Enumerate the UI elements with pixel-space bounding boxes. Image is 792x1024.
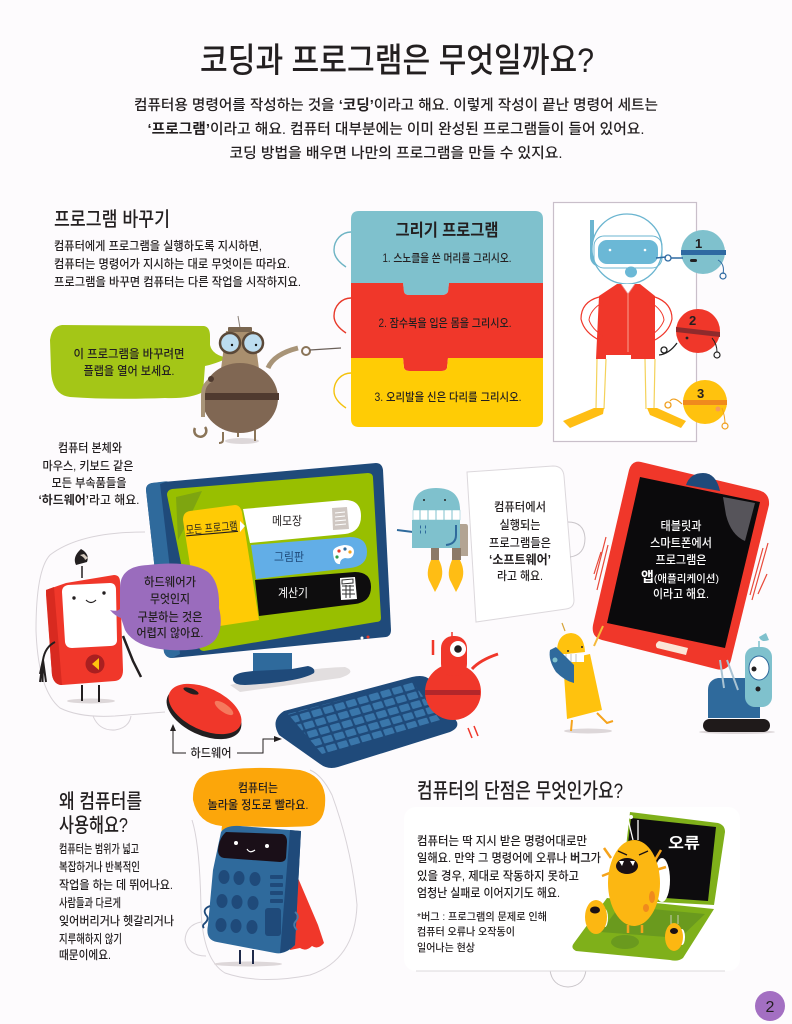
text block: why use computers: 지루해하지 않기: [59, 932, 122, 946]
speech bubble: fast: [193, 768, 325, 851]
motion lines: [594, 537, 768, 600]
big bug: [602, 815, 670, 933]
tablet body: [593, 462, 769, 670]
tablet text: 프로그램은: [656, 553, 706, 567]
speech bubble: hardware: 어렵지 않아요.: [136, 625, 204, 640]
puzzle outline around calculator: [185, 770, 357, 980]
panel: software card: 컴퓨터에서: [494, 500, 546, 514]
peeking blue figure: [686, 473, 720, 491]
puzzle tab: [550, 970, 586, 987]
text block: why use computers: 복잡하거나 반복적인: [59, 860, 140, 874]
text block: why use computers: 사람들과 다르게: [59, 896, 121, 910]
tablet buttons: [656, 641, 688, 655]
keyboard: [275, 676, 457, 768]
tablet text: 앱(애플리케이션): [641, 569, 719, 585]
icon: blue tracked robot: [699, 633, 775, 734]
card title: 그리기 프로그램: [396, 221, 498, 240]
heading: changing programs: 프로그램 바꾸기: [54, 208, 170, 231]
panel: software card: 라고 해요.: [497, 569, 543, 583]
laptop screen: [622, 818, 716, 901]
blue flap: [351, 211, 543, 295]
error label: 오류: [668, 835, 700, 852]
icon: blue ball robot 1: 1: [695, 236, 702, 251]
icon: red one-eyed robot: [425, 632, 498, 738]
calculator row: [255, 572, 371, 616]
icon: blue ball robot 1: [656, 230, 726, 279]
step 1: 1. 스노클을 쓴 머리를 그리시오.: [382, 252, 512, 265]
speech bubble: hardware: 구분하는 것은: [138, 610, 202, 624]
text block: hardware description: 모든 부속품들을: [52, 476, 126, 490]
yellow flap: [351, 358, 543, 427]
text block: changing programs: 프로그램을 바꾸면 컴퓨터는 다른 작업을 시작하지요.: [54, 275, 301, 289]
text block: hardware description: ‘하드웨어’라고 해요.: [38, 493, 140, 507]
monitor shadow: [230, 667, 350, 692]
text block: why use computers: 잊어버리거나 헷갈리거나: [59, 914, 174, 928]
icon: document: [332, 507, 349, 530]
panel: software card: 실행되는: [500, 517, 540, 532]
speech bubble: open the flap: [50, 325, 228, 399]
heading: why use computers: 사용해요?: [59, 814, 128, 837]
panel: diver picture frame: [554, 202, 696, 442]
step 3: 3. 오리발을 신은 다리를 그리시오.: [374, 391, 522, 404]
flaps behind program card: [334, 232, 351, 408]
label: hardware with arrows: [170, 724, 282, 760]
heading: why use computers: 왜 컴퓨터를: [59, 790, 142, 813]
speech bubble: fast: 컴퓨터는: [238, 781, 278, 795]
speech bubble: fast: 놀라울 정도로 빨라요.: [208, 798, 308, 812]
icon: yellow ball robot 3: [665, 380, 728, 429]
icon: calculator: [340, 577, 357, 600]
panel: software card: 프로그램들은: [489, 536, 551, 550]
text block: hardware description: 마우스, 키보드 같은: [42, 459, 134, 473]
notepad row: [243, 500, 361, 543]
speech bubble: open the flap: 플랩을 열어 보세요.: [84, 364, 174, 378]
illustration: diver: [563, 214, 686, 428]
title: 코딩과 프로그램은 무엇일까요?: [200, 42, 594, 80]
page number: [755, 991, 785, 1021]
speech bubble: hardware: 하드웨어가: [144, 575, 196, 589]
all programs panel: [183, 505, 259, 629]
text block: hardware description: [38, 441, 140, 507]
intro text: ‘프로그램’이라고 해요. 컴퓨터 대부분에는 이미 완성된 프로그램들이 들어 있어요.: [148, 121, 644, 138]
laptop base: [572, 898, 714, 961]
tablet text: 스마트폰에서: [650, 536, 712, 550]
monitor stand: [253, 653, 292, 674]
intro text: 컴퓨터용 명령어를 작성하는 것을 ‘코딩’이라고 해요. 이렇게 작성이 끝난 명령어 세트는: [134, 97, 658, 114]
text block: why use computers: 컴퓨터는 범위가 넓고: [59, 842, 139, 856]
heading: why use computers: [59, 790, 142, 837]
panel: software card: [467, 466, 585, 622]
all programs label: 모든 프로그램: [185, 520, 238, 537]
speech bubble: hardware: 무엇인지: [150, 592, 190, 606]
body text: [417, 834, 601, 900]
puzzle outline behind phone robot: [36, 532, 165, 730]
text block: changing programs: [54, 238, 301, 289]
icon: palette: [333, 545, 354, 564]
icon: mouse: [158, 673, 250, 750]
panel: computer weaknesses card: [404, 807, 740, 987]
screen: [167, 473, 381, 651]
monitor: [146, 463, 391, 692]
tablet screen: [607, 477, 760, 648]
intro text: 코딩 방법을 배우면 나만의 프로그램을 만들 수 있지요.: [230, 145, 562, 162]
power lights: [360, 636, 364, 640]
footnote: bug definition: 컴퓨터 오류나 오작동이: [417, 926, 515, 938]
icon: red phone robot: [40, 549, 141, 704]
icon: red ball robot 2: 2: [689, 313, 696, 328]
heading: computer weaknesses: 컴퓨터의 단점은 무엇인가요?: [417, 780, 623, 803]
panel: software card: ‘소프트웨어’: [489, 553, 551, 567]
icon: red ball robot 2: [659, 309, 720, 358]
tablet text: [641, 518, 719, 601]
tablet text: 태블릿과: [660, 518, 702, 533]
icon: jet robot: [397, 488, 468, 592]
text block: why use computers: 작업을 하는 데 뛰어나요.: [59, 878, 173, 892]
tablet: [593, 462, 769, 670]
text block: hardware description: 컴퓨터 본체와: [58, 441, 122, 455]
calculator label: 계산기: [278, 586, 308, 600]
screen glare: [723, 497, 755, 541]
speech bubble: open the flap: 이 프로그램을 바꾸려면: [74, 347, 184, 361]
body text: 일해요. 만약 그 명령어에 오류나 버그가: [417, 851, 601, 865]
panel: drawing program card: [351, 211, 543, 427]
footnote: bug definition: 일어나는 현상: [417, 941, 475, 954]
paint row: [251, 537, 367, 579]
laptop lid: [620, 812, 725, 905]
text block: changing programs: 컴퓨터는 명령어가 지시하는 대로 무엇이든 따라요.: [54, 257, 290, 271]
speech bubble: hardware: [110, 564, 221, 650]
body text: 있을 경우, 제대로 작동하지 못하고: [417, 869, 579, 883]
icon: yellow robot with phone: [550, 623, 613, 734]
icon: calculator robot: [203, 826, 324, 966]
tablet text: 이라고 해요.: [653, 587, 709, 601]
body text: 컴퓨터는 딱 지시 받은 명령어대로만: [417, 834, 587, 848]
notepad label: 메모장: [272, 514, 302, 528]
paint label: 그림판: [274, 550, 304, 564]
text block: why use computers: [59, 842, 174, 962]
body text: 엄청난 실패로 이어지기도 해요.: [417, 886, 560, 900]
small bug right: [665, 915, 685, 951]
text block: changing programs: 컴퓨터에게 프로그램을 실행하도록 지시하면,: [54, 238, 262, 253]
monitor side: [146, 481, 180, 658]
page number: 2: [766, 999, 775, 1016]
footnote: bug definition: [417, 910, 547, 954]
monitor case: [146, 463, 391, 658]
red flap: [351, 283, 543, 371]
step 2: 2. 잠수복을 입은 몸을 그리시오.: [378, 317, 512, 330]
text block: why use computers: 때문이에요.: [59, 948, 111, 962]
intro text: [134, 97, 658, 162]
monitor base: [233, 666, 314, 685]
label: hardware with arrows: 하드웨어: [190, 746, 232, 760]
icon: brown robot with pointer: [194, 316, 341, 444]
small bug left: [585, 900, 608, 934]
illustration: laptop with bugs: [572, 812, 725, 961]
icon: yellow ball robot 3: 3: [697, 386, 704, 401]
footnote: bug definition: *버그 : 프로그램의 문제로 인해: [417, 910, 547, 923]
